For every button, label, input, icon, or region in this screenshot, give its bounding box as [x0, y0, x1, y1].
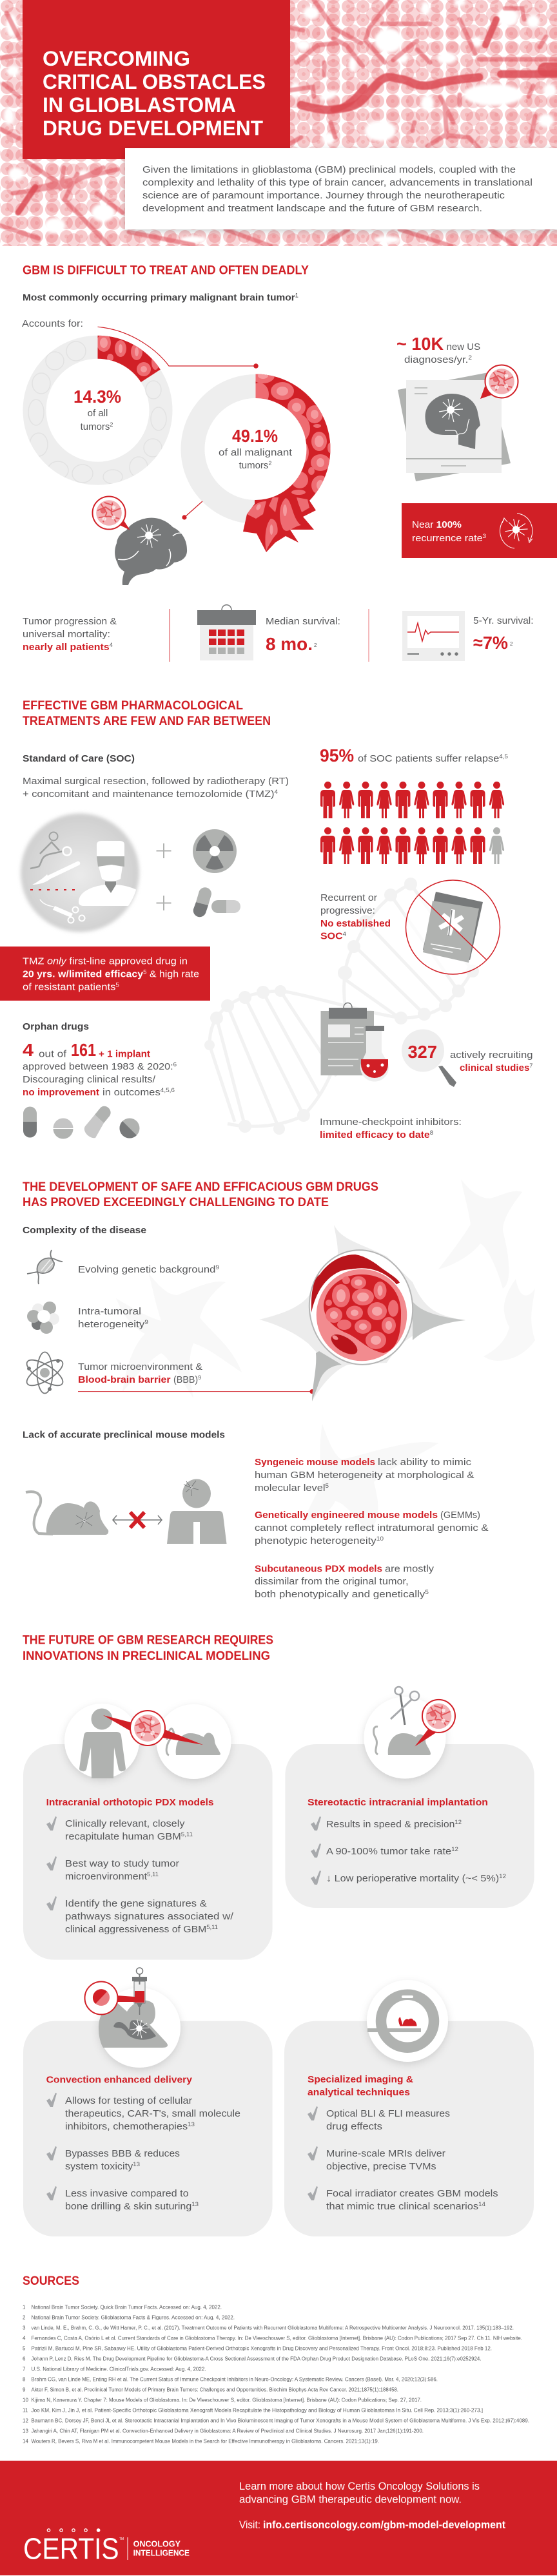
connector between donuts	[98, 327, 259, 369]
stat: 95% relapse	[320, 745, 508, 765]
background micro-vessel texture	[0, 0, 557, 246]
14.3% value	[73, 387, 121, 432]
title: DRUG DEVELOPMENT	[43, 117, 263, 140]
sources list: U.S. National Library of Medicine. ClinicalTrials.gov. Accessed: Aug. 4, 2022.	[31, 2366, 206, 2372]
stat: progression and mortality: Tumor progression &	[23, 616, 117, 627]
panel: intracranial orthotopic PDX	[23, 1704, 273, 1960]
sources list: Joo KM, Kim J, Jin J, et al. Patient-Specific Orthotopic Glioblastoma Xenograft Models Recapitulate the Histopathology and Biology of Human Glioblastomas In Situ. Cell Rep. 2013;3(1):260-273.]	[31, 2407, 483, 2413]
illustration: surgeon and instruments	[21, 813, 139, 932]
sources heading: SOURCES	[23, 2274, 79, 2288]
sources list: Baumann BC, Dorsey JF, Benci JL et al. Stereotactic Intracranial Implantation and In Vivo Bioluminescent Imaging of Tumor Xenografts in a Mouse Model System of Glioblastoma Multiforme. J Vis Exp. 2012;(67):4089.	[31, 2417, 529, 2423]
checklist: Identify the gene signatures &	[65, 1898, 207, 1909]
stat: 95% relapse: of SOC patients suffer relapse	[358, 753, 487, 764]
49.1% value	[219, 426, 293, 471]
checklist: Murine-scale MRIs deliver	[326, 2148, 445, 2159]
sources list: National Brain Tumor Society. Quick Brain Tumor Facts. Accessed on: Aug. 4, 2022.	[31, 2304, 222, 2310]
section heading: future of GBM research	[23, 1634, 273, 1663]
callout: near 100% recurrence: 3	[483, 533, 486, 539]
icon: calendar	[197, 605, 256, 660]
icon: MRI scanner	[367, 1980, 448, 2062]
sources list: Brahm CG, van Linde ME, Enting RH et al. The Current Status of Immune Checkpoint Inhibitors in Neuro-Oncology: A Systematic Review. Cancers (Basel). Mar. 4, 2020;12(3):586.	[31, 2376, 438, 2382]
panel: stereotactic implantation	[285, 1687, 534, 1908]
icon: heterogeneous cells	[27, 1302, 59, 1334]
text: genetic background: 9	[215, 1264, 219, 1271]
section heading: development challenging: THE DEVELOPMENT OF SAFE AND EFFICACIOUS GBM DRUGS	[23, 1180, 378, 1194]
checklist: 12	[499, 1873, 506, 1879]
text: orphan drugs: + 1 implant	[99, 1049, 150, 1059]
text: orphan drugs: 4	[23, 1040, 34, 1060]
text: new US diagnoses: new US	[447, 341, 480, 352]
stat: median survival: 2	[314, 642, 317, 648]
checklist: system toxicity	[65, 2161, 128, 2172]
GEMMs: (GEMMs)	[440, 1510, 480, 1521]
title	[43, 47, 266, 140]
sources list: 5	[23, 2345, 26, 2351]
subheading: most common: 1	[295, 293, 298, 299]
stat: progression and mortality: nearly all patients	[23, 642, 104, 653]
sources list: 8	[23, 2376, 26, 2382]
text: microenvironment and BBB: Blood-brain barrier	[78, 1374, 171, 1385]
stat: progression and mortality	[23, 616, 117, 653]
checklist: Best way to study tumor	[65, 1858, 179, 1869]
section heading: development challenging	[23, 1180, 378, 1209]
text: orphan drugs: in outcomes	[103, 1087, 155, 1098]
logo: Certis Oncology Intelligence: CERTIS	[23, 2532, 119, 2566]
stat: 327 clinical studies	[402, 1030, 533, 1087]
callout: near 100% recurrence: Near 100%	[412, 519, 462, 530]
icon: scissors and mouse	[364, 1687, 455, 1778]
checklist	[46, 1816, 234, 1935]
stat: 5-year survival: 5-Yr. survival:	[473, 615, 534, 626]
call to action: Visit:	[239, 2519, 260, 2531]
sources list: 14	[23, 2438, 28, 2444]
checklist: drug effects	[326, 2121, 382, 2132]
icon: DNA	[27, 1250, 63, 1284]
subheading: most common: Most commonly occurring primary malignant brain tumor	[23, 293, 286, 303]
checklist: 12	[451, 1846, 458, 1852]
checklist: 13	[188, 2121, 195, 2128]
icon: radiation	[193, 829, 237, 873]
checklist: pathways signatures associated w/	[65, 1911, 234, 1922]
checklist: inhibitors, chemotherapies	[65, 2121, 178, 2132]
text: orphan drugs: Discouraging clinical results/	[23, 1074, 156, 1085]
text: heterogeneity: Intra-tumoral	[78, 1306, 141, 1317]
section heading: development challenging: HAS PROVED EXCEEDINGLY CHALLENGING TO DATE	[23, 1196, 329, 1209]
49.1% value: 2	[268, 460, 271, 466]
subcutaneous PDX: dissimilar from the original tumor,	[255, 1576, 409, 1587]
text: immune-checkpoint inhibitors	[320, 1117, 462, 1140]
sources list	[23, 2304, 529, 2444]
checklist	[311, 1816, 506, 1885]
intro text panel	[125, 148, 557, 229]
stat: progression and mortality: universal mortality:	[23, 629, 110, 640]
checklist: Less invasive compared to	[65, 2188, 189, 2199]
GEMMs: phenotypic heterogeneity	[255, 1535, 363, 1546]
text: recurrent or progressive: 4	[343, 930, 346, 937]
icon: medical scan with head	[398, 365, 518, 481]
text: microenvironment and BBB: Tumor microenvironment &	[78, 1361, 202, 1372]
text: orphan drugs: approved between 1983 & 2020:	[23, 1061, 162, 1072]
checklist: Focal irradiator creates GBM models	[326, 2188, 498, 2199]
text: immune-checkpoint inhibitors: Immune-checkpoint inhibitors:	[320, 1117, 462, 1128]
text: heterogeneity	[78, 1306, 148, 1330]
49.1% value: tumors	[239, 460, 268, 471]
syngeneic models: lack ability to mimic	[378, 1457, 472, 1468]
intro text panel: Given the limitations in glioblastoma (GBM) preclinical models, coupled with the	[142, 164, 516, 175]
title: OVERCOMING	[43, 47, 190, 70]
syngeneic models: molecular level	[255, 1483, 319, 1494]
sources list: Akter F, Simon B, et al. Preclinical Tumor Models of Primary Brain Tumors: Challenges and Opportunities. Biochim Biophys Acta Rev Cancer. 2021;1875(1):188458.	[31, 2387, 398, 2392]
text: recurrent or progressive: No established	[320, 918, 391, 929]
connector donut to brain	[182, 501, 202, 520]
sources list: 4	[23, 2335, 26, 2341]
text: microenvironment and BBB: 9	[198, 1374, 201, 1381]
card title: Specialized imaging &	[308, 2074, 413, 2085]
text: mouse model limitations	[255, 1457, 489, 1600]
callout: near 100% recurrence	[402, 503, 557, 558]
text: recurrent or progressive: progressive:	[320, 905, 375, 916]
checklist	[46, 2093, 240, 2212]
text: standard of care: + concomitant and maintenance temozolomide (TMZ)	[23, 789, 252, 800]
text: microenvironment and BBB	[78, 1361, 202, 1385]
syngeneic models: Syngeneic mouse models	[255, 1457, 375, 1468]
checklist: 14	[478, 2201, 485, 2207]
subheading: lack of mouse models: Lack of accurate preclinical mouse models	[23, 1429, 225, 1440]
subheading: complexity: Complexity of the disease	[23, 1225, 146, 1236]
card title: analytical techniques	[308, 2087, 410, 2098]
text: immune-checkpoint inhibitors: limited efficacy to date	[320, 1129, 424, 1140]
text: recurrent or progressive: Recurrent or	[320, 892, 377, 903]
sources list: 2	[23, 2314, 26, 2320]
text: orphan drugs: 4,5,6	[161, 1087, 175, 1093]
checklist: clinical aggressiveness of GBM	[65, 1924, 199, 1935]
section heading: GBM is difficult: GBM IS DIFFICULT TO TREAT AND OFTEN DEADLY	[23, 264, 309, 278]
section heading: treatments few and far between: EFFECTIVE GBM PHARMACOLOGICAL	[23, 699, 243, 713]
subcutaneous PDX: 5	[425, 1589, 429, 1595]
syngeneic models: human GBM heterogeneity at morphological &	[255, 1470, 474, 1481]
call to action	[239, 2480, 505, 2531]
sources list: 13	[23, 2428, 28, 2434]
stat: 5-year survival	[473, 615, 534, 653]
14.3% value: of all	[88, 408, 108, 419]
call to action: advancing GBM therapeutic development now.	[239, 2493, 462, 2505]
stat: progression and mortality: 4	[110, 642, 113, 648]
call to action: info.certisoncology.com/gbm-model-development	[263, 2519, 505, 2531]
subcutaneous PDX: are mostly	[385, 1564, 435, 1575]
checklist: Optical BLI & FLI measures	[326, 2108, 450, 2119]
sources list: van Linde, M. E., Brahm, C. G., de Witt Hamer, P. C., et al. (2017). Treatment Outcome of Patients with Recurrent Glioblastoma Multiforme: A Retrospective Multicenter Analysis. J Neurooncol. 2017. 135(1):183–192.	[31, 2325, 514, 2331]
call to action: Learn more about how Certis Oncology Solutions is	[239, 2480, 480, 2492]
GEMMs: cannot completely reflect intratumoral genomic &	[255, 1523, 489, 1533]
stat: 327 clinical studies: clinical studies	[460, 1062, 529, 1073]
checklist: A 90-100% tumor take rate	[326, 1846, 441, 1857]
title: IN GLIOBLASTOMA	[43, 93, 236, 117]
icon: heart monitor	[402, 611, 465, 661]
icon: brain with tumor	[93, 496, 187, 585]
panel: convection enhanced delivery	[23, 1968, 273, 2236]
footer panel	[0, 2461, 557, 2575]
sources list: National Brain Tumor Society. Glioblastoma Facts & Figures. Accessed on: Aug. 4, 2022.	[31, 2314, 235, 2320]
sources list: 12	[23, 2417, 28, 2423]
card title	[308, 2074, 413, 2098]
connector: BBB to vessel	[78, 1389, 315, 1394]
sources list: 11	[23, 2407, 28, 2413]
text: new US diagnoses: diagnoses/yr.	[404, 354, 461, 365]
stat: 5-year survival: 2	[510, 641, 513, 647]
sources list: Fernandes C, Costa A, Osório L et al. Current Standards of Care in Glioblastoma Therapy. In: De Vleeschouwer S, editor. Glioblastoma [Internet]. Brisbane (AU): Codon Publications; 2017 Sep 27. Ch 11. NIH website.	[31, 2335, 522, 2341]
checklist: ↓ Low perioperative mortality (~< 5%)	[326, 1873, 486, 1884]
icon: human with tumor	[167, 1479, 227, 1544]
sources list: Johann P, Lenz D, Ries M. The Drug Development Pipeline for Glioblastoma-A Cross Sectional Assessment of the FDA Orphan Drug Product Designation Database. PLoS One. 2021;16(7):e0252924.	[31, 2356, 481, 2361]
sources list: 10	[23, 2397, 28, 2403]
sources list: Kijima N, Kanemura Y. Chapter 7: Mouse Models of Glioblastoma. In: De Vleeschouwer S, editor. Glioblastoma [Internet]. Brisbane (AU): Codon Publications; Sep. 27, 2017.	[31, 2397, 422, 2403]
checklist: Clinically relevant, closely	[65, 1818, 185, 1829]
14.3% value: 14.3%	[73, 387, 121, 407]
14.3% value: 2	[110, 421, 113, 428]
sources list: 9	[23, 2387, 26, 2392]
checklist: recapitulate human GBM	[65, 1831, 172, 1842]
logo: Certis Oncology Intelligence: ONCOLOGY	[133, 2539, 181, 2549]
GEMMs	[255, 1510, 489, 1546]
card title: Convection enhanced delivery	[46, 2075, 193, 2086]
text: orphan drugs	[23, 1021, 177, 1098]
stat: 327 clinical studies: 327	[407, 1042, 437, 1062]
icons: pills	[23, 1106, 139, 1139]
donut chart: 49.1% of malignant tumors	[193, 368, 333, 552]
text: new US diagnoses: 2	[468, 354, 472, 361]
checklist: Allows for testing of cellular	[65, 2095, 192, 2106]
checklist: 13	[191, 2201, 199, 2207]
text: recurrent or progressive	[320, 892, 391, 942]
section heading: treatments few and far between	[23, 699, 271, 728]
callout: TMZ only drug: of resistant patients	[23, 981, 106, 992]
section heading: future of GBM research: INNOVATIONS IN PRECLINICAL MODELING	[23, 1649, 270, 1663]
text: orphan drugs: 6	[173, 1061, 177, 1068]
text: heterogeneity: 9	[144, 1319, 148, 1325]
intro text panel: development and treatment landscape and the future of GBM research.	[142, 203, 482, 214]
subcutaneous PDX	[255, 1564, 435, 1600]
subcutaneous PDX: Subcutaneous PDX models	[255, 1564, 382, 1575]
text: orphan drugs: 161	[71, 1040, 96, 1060]
GEMMs: Genetically engineered mouse models	[255, 1510, 438, 1521]
icon: no established care book	[406, 880, 500, 974]
text: standard of care	[23, 753, 289, 800]
logo: Certis Oncology Intelligence: TM	[119, 2537, 124, 2541]
stat: 5-year survival: ≈7%	[473, 633, 508, 653]
card title: Intracranial orthotopic PDX models	[46, 1797, 214, 1808]
section heading: treatments few and far between: TREATMENTS ARE FEW AND FAR BETWEEN	[23, 715, 271, 728]
stat: 327 clinical studies: actively recruiting	[450, 1050, 533, 1061]
stat: 95% relapse: 4,5	[499, 753, 508, 760]
checklist: microenvironment	[65, 1871, 142, 1882]
section heading: future of GBM research: THE FUTURE OF GBM RESEARCH REQUIRES	[23, 1634, 273, 1648]
stat: median survival: Median survival:	[266, 616, 340, 627]
icon: not equal arrow	[113, 1512, 162, 1528]
icon: plus	[156, 843, 171, 858]
syngeneic models: 5	[326, 1483, 329, 1489]
icon: human and mouse	[64, 1704, 231, 1779]
header: textured banner	[0, 0, 557, 246]
icon: mouse with tumor	[26, 1492, 108, 1535]
card title: Stereotactic intracranial implantation	[308, 1797, 488, 1808]
sources list: Jahangiri A, Chin AT, Flanigan PM et al. Convection-Enhanced Delivery in Glioblastoma: A Review of Preclinical and Clinical Studies. J Neurosurg. 2017 Jan;126(1):191-200.	[31, 2428, 424, 2434]
callout: TMZ only drug: 5	[115, 981, 119, 988]
text: orphan drugs: out of	[39, 1049, 67, 1059]
tendrils	[247, 497, 309, 551]
sources list: 7	[23, 2366, 26, 2372]
icon: plus	[156, 896, 171, 910]
donut chart: 14.3% of all tumors	[28, 334, 166, 484]
checklist: 12	[454, 1819, 462, 1825]
checklist: 5,11	[147, 1871, 159, 1878]
icon: atom	[23, 1352, 66, 1393]
sources list: 6	[23, 2356, 26, 2361]
checklist: Bypasses BBB & reduces	[65, 2148, 180, 2159]
text: standard of care: Standard of Care (SOC)	[23, 753, 135, 764]
stat: 327 clinical studies: 7	[529, 1062, 533, 1069]
checklist: bone drilling & skin suturing	[65, 2201, 183, 2212]
checklist: that mimic true clinical scenarios	[326, 2201, 465, 2212]
callout: near 100% recurrence: recurrence rate	[412, 533, 478, 544]
49.1% value: 49.1%	[232, 426, 278, 446]
logo: Certis Oncology Intelligence: INTELLIGENCE	[133, 2548, 190, 2558]
callout: TMZ only drug: TMZ only first-line approved drug in	[23, 956, 188, 967]
checklist: 5,11	[206, 1924, 218, 1930]
text: immune-checkpoint inhibitors: 8	[430, 1129, 433, 1136]
background: DNA helix	[204, 878, 479, 1135]
intro text panel: complexity and lethality of this type of brain cancer, advancements in translational	[142, 177, 533, 188]
title block	[23, 0, 290, 159]
sources list: 3	[23, 2325, 26, 2331]
text: heterogeneity: heterogeneity	[78, 1319, 137, 1330]
checklist: objective, precise TVMs	[326, 2161, 436, 2172]
intro text panel: science are of paramount importance. Journey through the neurotherapeutic	[142, 190, 505, 201]
checklist: therapeutics, CAR-T's, small molecule	[65, 2108, 240, 2119]
sources list: Patrizii M, Bartucci M, Pine SR, Sabaawy HE. Utility of Glioblastoma Patient-Derived Orthotopic Xenografts in Drug Discovery and Personalized Therapy. Front Oncol. 2018;8:23. Published 2018 Feb 12.	[31, 2345, 492, 2351]
text: genetic background: Evolving genetic background	[78, 1264, 202, 1275]
text: new US diagnoses: ~ 10K	[396, 334, 444, 354]
text: orphan drugs: Orphan drugs	[23, 1021, 89, 1032]
text: standard of care: Maximal surgical resection, followed by radiotherapy (RT)	[23, 776, 289, 787]
syngeneic models	[255, 1457, 474, 1494]
callout: TMZ only drug: & high rate	[146, 969, 199, 979]
stat: median survival	[266, 616, 340, 654]
background: faint astrocytes	[116, 1179, 535, 1533]
accounts for label: Accounts for:	[22, 318, 83, 329]
checklist	[308, 2106, 498, 2212]
title: CRITICAL OBSTACLES	[43, 70, 266, 93]
sources list: Wouters R, Bevers S, Riva M et al. Immunocompetent Mouse Models in the Search for Effective Immunotherapy in Glioblastoma. Cancers. 2021;13(1):19.	[31, 2438, 379, 2444]
14.3% value: tumors	[81, 421, 110, 432]
callout: TMZ only drug: 20 yrs. w/limited efficacy	[23, 969, 144, 979]
GEMMs: 10	[376, 1535, 384, 1542]
icon: capsules	[193, 887, 240, 917]
callout: TMZ only drug	[0, 947, 210, 1001]
pictogram: patients who relapse	[320, 782, 504, 864]
stat: median survival: 8 mo.	[266, 634, 313, 654]
panel: specialized imaging	[284, 1980, 534, 2236]
49.1% value: of all malignant	[219, 447, 293, 458]
logo: Certis Oncology Intelligence	[23, 2529, 190, 2566]
checklist: 5,11	[181, 1831, 193, 1838]
checklist: Results in speed & precision	[326, 1819, 448, 1830]
icon: syringe into mouse brain	[85, 1968, 181, 2068]
subcutaneous PDX: both phenotypically and genetically	[255, 1589, 405, 1600]
text: new US diagnoses	[396, 334, 480, 365]
text: orphan drugs: no improvement	[23, 1087, 99, 1098]
stat: 95% relapse: 95%	[320, 745, 354, 765]
illustration: tumor blood vessel with astrocyte	[259, 1225, 465, 1401]
text: microenvironment and BBB: (BBB)	[173, 1374, 199, 1385]
icon: clipboard and flask	[321, 1003, 389, 1082]
icon: recurrence cycle	[500, 514, 533, 548]
text: recurrent or progressive: SOC	[320, 930, 342, 942]
callout: TMZ only drug: 5	[143, 969, 146, 976]
checklist: 13	[133, 2161, 140, 2167]
text: standard of care: 4	[274, 789, 278, 795]
sources list: 1	[23, 2304, 26, 2310]
